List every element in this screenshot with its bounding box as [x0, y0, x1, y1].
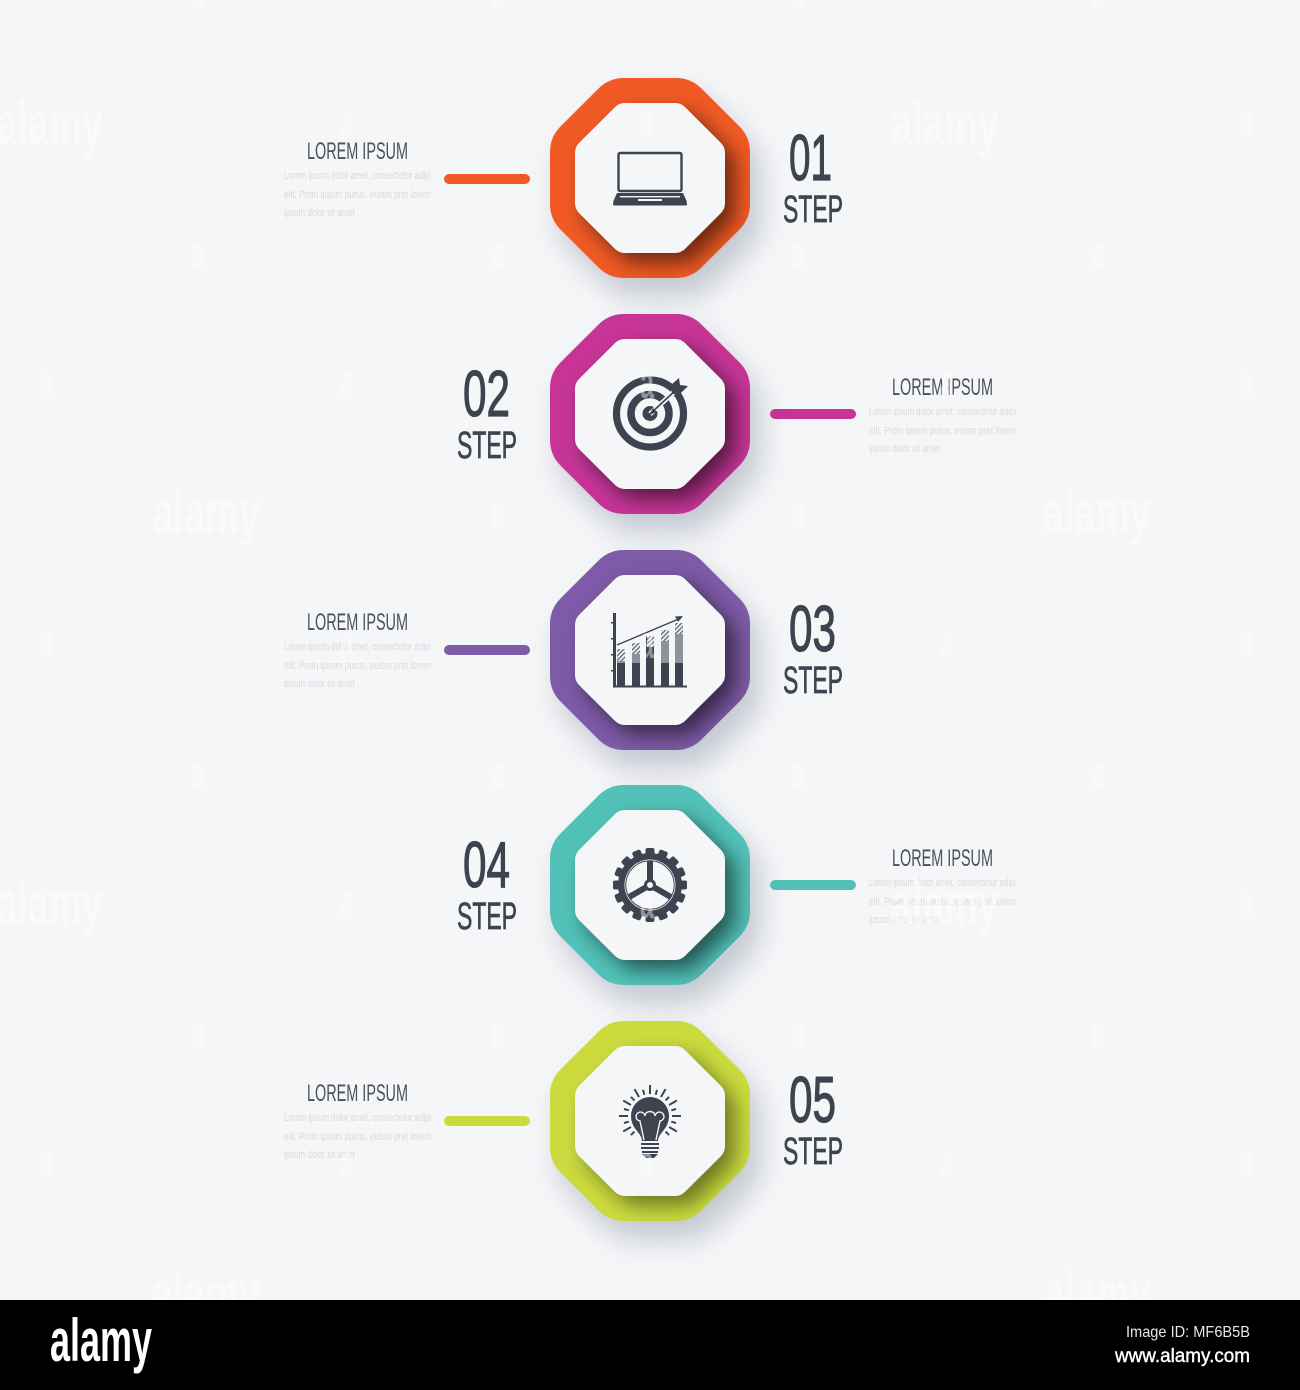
- step 5 description: ipsum dolor sit amet: [284, 1149, 355, 1161]
- watermark pattern: a: [791, 1006, 805, 1058]
- step 3 number: 03: [789, 592, 836, 665]
- watermark pattern: a: [40, 356, 54, 408]
- watermark pattern: a: [1240, 96, 1254, 148]
- watermark pattern: a: [640, 616, 654, 668]
- watermark pattern: a: [940, 616, 954, 668]
- watermark pattern: a: [340, 96, 354, 148]
- step 4 octagon badge: [550, 785, 760, 1003]
- watermark pattern: a: [340, 616, 354, 668]
- watermark pattern: a: [191, 226, 205, 278]
- step 2 description: [869, 374, 1016, 455]
- step 2 description: Lorem ipsum dolor amet, consectetur adipi: [869, 406, 1016, 418]
- step 2 panel: [457, 314, 1016, 532]
- icon: rising bar chart: [611, 613, 687, 688]
- step 4 description: Lorem ipsum dolor amet, consectetur adipi: [869, 877, 1016, 889]
- step 1 panel: [284, 78, 843, 296]
- watermark pattern: alamy: [1043, 479, 1151, 546]
- step 3 description: [284, 609, 431, 690]
- watermark pattern: a: [40, 1136, 54, 1188]
- step 5 description: [284, 1080, 431, 1161]
- icon: gear: [613, 848, 687, 922]
- footer image id: Image ID: MF6B5B: [1126, 1324, 1250, 1341]
- watermark pattern: a: [1240, 876, 1254, 928]
- watermark pattern: a: [1091, 746, 1105, 798]
- icon: light bulb: [619, 1085, 681, 1158]
- watermark pattern: a: [940, 356, 954, 408]
- step 2 octagon badge: [550, 314, 760, 532]
- step 2 number: [457, 357, 517, 467]
- step 4 description: [869, 845, 1016, 926]
- step 3 description: elit. Proin ipsum purus, euism pret lorem: [284, 660, 431, 672]
- step 3 description: Lorem ipsum dolor amet, consectetur adipi: [284, 641, 431, 653]
- step 5 number: [783, 1063, 843, 1173]
- watermark pattern: a: [491, 746, 505, 798]
- step 4 description: elit. Proin ipsum purus, euism pret lorem: [869, 896, 1016, 908]
- watermark pattern: a: [340, 1136, 354, 1188]
- step 3 description: ipsum dolor sit amet: [284, 678, 355, 690]
- step 4 number: 04: [463, 828, 510, 901]
- watermark pattern: a: [491, 486, 505, 538]
- watermark pattern: a: [340, 876, 354, 928]
- step 5 panel: [284, 1021, 843, 1239]
- watermark pattern: a: [1240, 616, 1254, 668]
- watermark pattern: a: [640, 356, 654, 408]
- step 3 connector bar: [444, 645, 530, 655]
- watermark pattern: a: [191, 746, 205, 798]
- step 4 connector bar: [770, 880, 856, 890]
- step 4 number: STEP: [457, 896, 517, 938]
- step 5 description: LOREM IPSUM: [307, 1080, 408, 1107]
- step 2 connector bar: [770, 409, 856, 419]
- step 5 octagon badge: [550, 1021, 760, 1239]
- step 2 number: 02: [463, 357, 510, 430]
- step 4 description: LOREM IPSUM: [892, 845, 993, 872]
- watermark pattern: a: [340, 356, 354, 408]
- step 1 description: elit. Proin ipsum purus, euism pret lorem: [284, 189, 431, 201]
- step 1 number: 01: [789, 121, 832, 194]
- step 1 description: LOREM IPSUM: [307, 138, 408, 165]
- step 5 number: STEP: [783, 1131, 843, 1173]
- watermark pattern: a: [1240, 356, 1254, 408]
- step 4 panel: [457, 785, 1016, 1003]
- footer bar: [0, 1300, 1300, 1390]
- watermark pattern: a: [791, 486, 805, 538]
- step 1 number: [783, 121, 843, 231]
- step 2 description: ipsum dolor sit amet: [869, 443, 940, 455]
- watermark pattern: a: [940, 1136, 954, 1188]
- step 3 panel: [284, 550, 843, 768]
- watermark pattern: a: [640, 876, 654, 928]
- watermark pattern: a: [191, 1006, 205, 1058]
- step 5 description: elit. Proin ipsum purus, euism pret lorem: [284, 1131, 431, 1143]
- watermark pattern: alamy: [152, 1260, 260, 1327]
- watermark pattern: a: [791, 226, 805, 278]
- step 2 description: LOREM IPSUM: [892, 374, 993, 401]
- step 3 number: [783, 592, 843, 702]
- watermark pattern: alamy: [1043, 1260, 1151, 1327]
- step 1 octagon badge: [550, 78, 760, 296]
- watermark pattern: alamy: [891, 870, 999, 937]
- step 5 connector bar: [444, 1116, 530, 1126]
- icon: target with arrow: [616, 378, 688, 447]
- watermark pattern: alamy: [152, 479, 260, 546]
- step 3 octagon badge: [550, 550, 760, 768]
- watermark pattern: a: [1091, 1006, 1105, 1058]
- watermark pattern: a: [40, 616, 54, 668]
- watermark pattern: a: [640, 1136, 654, 1188]
- watermark pattern: a: [791, 746, 805, 798]
- watermark pattern: alamy: [0, 870, 103, 937]
- watermark pattern: a: [640, 96, 654, 148]
- step 2 description: elit. Proin ipsum purus, euism pret lorem: [869, 425, 1016, 437]
- watermark pattern: a: [1091, 226, 1105, 278]
- footer url: www.alamy.com: [1114, 1346, 1250, 1367]
- footer logo: alamy: [50, 1307, 152, 1374]
- watermark pattern: alamy: [0, 90, 103, 157]
- step 1 description: Lorem ipsum dolor amet, consectetur adipi: [284, 170, 431, 182]
- watermark pattern: a: [1240, 1136, 1254, 1188]
- step 1 connector bar: [444, 174, 530, 184]
- step 4 description: ipsum dolor sit amet: [869, 914, 940, 926]
- step 4 number: [457, 828, 517, 938]
- step 5 number: 05: [789, 1063, 836, 1136]
- watermark pattern: a: [491, 226, 505, 278]
- icon: laptop: [613, 153, 687, 206]
- step 1 description: ipsum dolor sit amet: [284, 207, 355, 219]
- step 5 description: Lorem ipsum dolor amet, consectetur adipi: [284, 1112, 431, 1124]
- watermark pattern: alamy: [891, 90, 999, 157]
- step 2 number: STEP: [457, 425, 517, 467]
- watermark pattern: a: [491, 1006, 505, 1058]
- step 1 description: [284, 138, 431, 219]
- step 3 number: STEP: [783, 660, 843, 702]
- step 1 number: STEP: [783, 189, 843, 231]
- step 3 description: LOREM IPSUM: [307, 609, 408, 636]
